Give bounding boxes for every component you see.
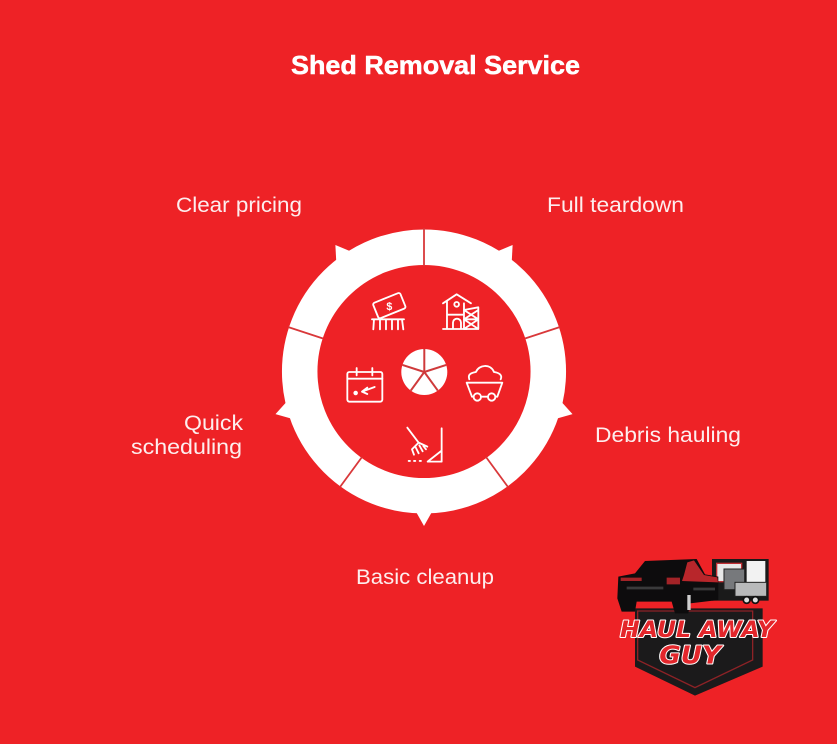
segment dividers xyxy=(288,228,560,487)
label: quick scheduling xyxy=(131,412,244,459)
title: Shed Removal Service xyxy=(291,50,580,80)
label: full teardown: Full teardown xyxy=(547,194,684,217)
logo truck xyxy=(617,559,718,613)
icon: mine cart xyxy=(467,366,502,401)
ring xyxy=(300,247,548,496)
label: debris hauling: Debris hauling xyxy=(595,424,741,447)
logo wordmark: GUY xyxy=(659,641,723,670)
cycle ring diagram xyxy=(273,228,575,526)
label: quick scheduling: Quick xyxy=(184,412,244,435)
label: clear pricing: Clear pricing xyxy=(176,194,302,217)
label: basic cleanup: Basic cleanup xyxy=(356,566,494,589)
icon: barn with scaffold xyxy=(443,294,478,329)
logo shield xyxy=(635,608,763,696)
icon: money and comb xyxy=(372,292,406,329)
icon: calendar xyxy=(347,368,382,402)
segment arrowheads xyxy=(273,239,575,526)
logo trailer load xyxy=(712,559,769,603)
logo: Haul Away Guy xyxy=(617,559,776,696)
label: quick scheduling: scheduling xyxy=(131,436,242,459)
logo wordmark: HAUL AWAY xyxy=(620,618,776,643)
icon: money and comb: $ xyxy=(386,301,392,313)
center pie xyxy=(401,349,447,395)
icon: rake and dustpan xyxy=(407,428,442,462)
logo wordmark xyxy=(620,618,776,670)
